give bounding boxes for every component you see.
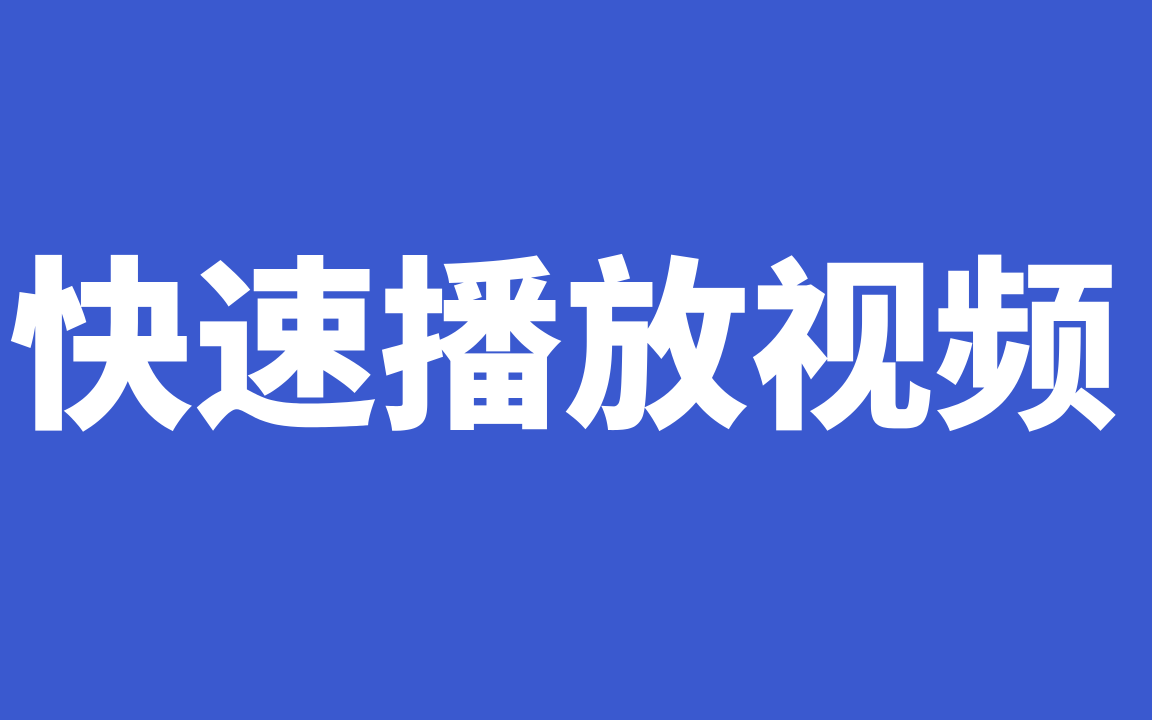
title: 快速播放视频	[9, 247, 1119, 453]
